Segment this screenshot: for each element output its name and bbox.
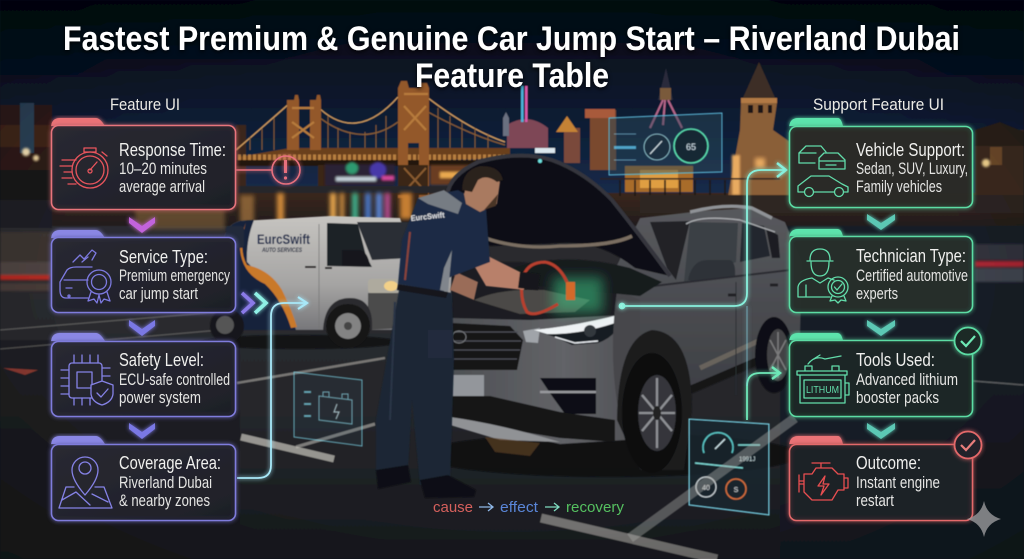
text: coverage area: & nearby zones: [119, 492, 210, 510]
icon: lithium battery: LITHUM: [806, 385, 839, 396]
technician legs: [376, 285, 476, 498]
van wheels: [210, 298, 372, 348]
SUV cabin and body: [600, 206, 802, 420]
panel: safety level: [51, 333, 236, 416]
text: technician type: experts: [856, 285, 898, 303]
technician torso: [397, 190, 490, 298]
van logo: AUTO SERVICES: [261, 248, 302, 254]
chevron arrow: [129, 320, 155, 336]
technician arm: [450, 255, 540, 300]
text: safety level: [119, 350, 230, 407]
icon: sparkle watermark: [967, 501, 1001, 537]
chevron arrow: [867, 423, 895, 439]
caption: cause effect recovery: cause: [433, 499, 473, 516]
chevron arrow: [867, 214, 895, 230]
text: vehicle support: [856, 140, 968, 196]
panel: coverage area: [51, 436, 236, 520]
panel: response time: [51, 118, 236, 210]
text: technician type: Technician Type:: [856, 246, 966, 266]
red connector node: [236, 156, 300, 184]
text: service type: Service Type:: [119, 247, 208, 267]
caption: cause effect recovery: [433, 499, 624, 516]
open hood: [447, 155, 670, 296]
text: safety level: Safety Level:: [119, 350, 204, 370]
chevron arrow: [129, 423, 155, 439]
text: vehicle support: Family vehicles: [856, 178, 942, 196]
text: response time: Response Time:: [119, 140, 226, 160]
technician head: [462, 166, 503, 212]
right castle towers and buildings: [503, 62, 1024, 213]
top holographic dashboard panel: [609, 113, 722, 175]
text: coverage area: Riverland Dubai: [119, 474, 212, 492]
icon: car with rosette: [60, 250, 111, 303]
title: [63, 20, 960, 95]
text: service type: car jump start: [119, 285, 198, 303]
parking lines: [0, 312, 1024, 559]
city lights behind the bridge: [325, 162, 470, 186]
text: vehicle support: Sedan, SUV, Luxury,: [856, 160, 968, 178]
van logo: EurcSwift: [257, 231, 310, 247]
icon: lithium battery: [797, 355, 849, 403]
van windows: [305, 222, 410, 330]
text: vehicle support: Vehicle Support:: [856, 140, 965, 160]
SUV with open hood: [420, 155, 802, 477]
van logo: [257, 231, 310, 254]
badge: green check: [954, 328, 982, 354]
icon: engine with bolt: [799, 463, 848, 500]
left buildings: [0, 103, 246, 228]
caption: cause effect recovery: recovery: [566, 499, 624, 516]
panel: technician type: [789, 229, 972, 312]
bottom right holographic gauge panel: S: [734, 487, 739, 494]
flow arrow: engine to vehicle support: [620, 163, 786, 308]
panel: vehicle support: [789, 118, 972, 208]
text: outcome: Instant engine: [856, 474, 940, 492]
van chevrons: [242, 293, 266, 313]
text: service type: Premium emergency: [119, 267, 231, 285]
text: technician type: Certified automotive: [856, 267, 968, 285]
technician: [376, 166, 540, 498]
text: outcome: [856, 453, 940, 510]
text: safety level: power system: [119, 389, 201, 407]
chevron arrow: [867, 320, 895, 336]
panel: service type: [51, 230, 236, 312]
panel: tools used: [789, 328, 982, 416]
flow arrow: gauge panel to tools used: [747, 306, 780, 420]
text: response time: [119, 140, 226, 196]
van headlight and bumper: [368, 279, 400, 330]
road light streaks: [0, 232, 1024, 291]
icon: chip and shield: [61, 355, 113, 405]
heading: feature UI: Feature UI: [110, 95, 180, 114]
service van: [200, 216, 468, 349]
text: response time: 10–20 minutes: [119, 160, 207, 178]
suspension bridge: [235, 81, 510, 198]
text: outcome: restart: [856, 492, 894, 510]
front wheel: [617, 330, 692, 473]
bottom right holographic gauge panel: 40: [702, 485, 710, 492]
SUV front end: [450, 262, 640, 456]
bottom right holographic gauge panel: [689, 419, 769, 515]
engine bay with jumper cables: [522, 262, 603, 314]
badge: red check: [954, 432, 982, 458]
icon: map pin: [59, 457, 112, 508]
technician torso: EurcSwift: [410, 210, 445, 223]
icon: three cars: [798, 146, 848, 196]
text: tools used: Advanced lithium: [856, 371, 958, 389]
icon: technician with badge: [798, 249, 848, 303]
text: tools used: [856, 350, 958, 407]
text: coverage area: Coverage Area:: [119, 453, 221, 473]
text: technician type: [856, 246, 968, 303]
panel: outcome: [789, 432, 982, 520]
bottom right holographic gauge panel: 1991J: [739, 457, 755, 463]
flow arrow: coverage area to van: [237, 297, 307, 478]
text: coverage area: [119, 453, 221, 510]
water reflections: [135, 193, 412, 229]
top holographic dashboard panel: 65: [686, 142, 696, 152]
text: tools used: Tools Used:: [856, 350, 935, 370]
chevron arrow: [129, 217, 155, 233]
rear wheel: [755, 317, 793, 393]
caption: cause effect recovery: effect: [500, 499, 539, 516]
left holographic battery panel: [294, 372, 362, 446]
title: Feature Table: [415, 57, 609, 95]
icon: stopwatch: [60, 148, 108, 188]
text: service type: [119, 247, 231, 303]
text: response time: average arrival: [119, 178, 205, 196]
text: outcome: Outcome:: [856, 453, 921, 473]
text: tools used: booster packs: [856, 389, 939, 407]
heading: support feature UI: Support Feature UI: [813, 95, 944, 114]
text: safety level: ECU-safe controlled: [119, 371, 230, 389]
